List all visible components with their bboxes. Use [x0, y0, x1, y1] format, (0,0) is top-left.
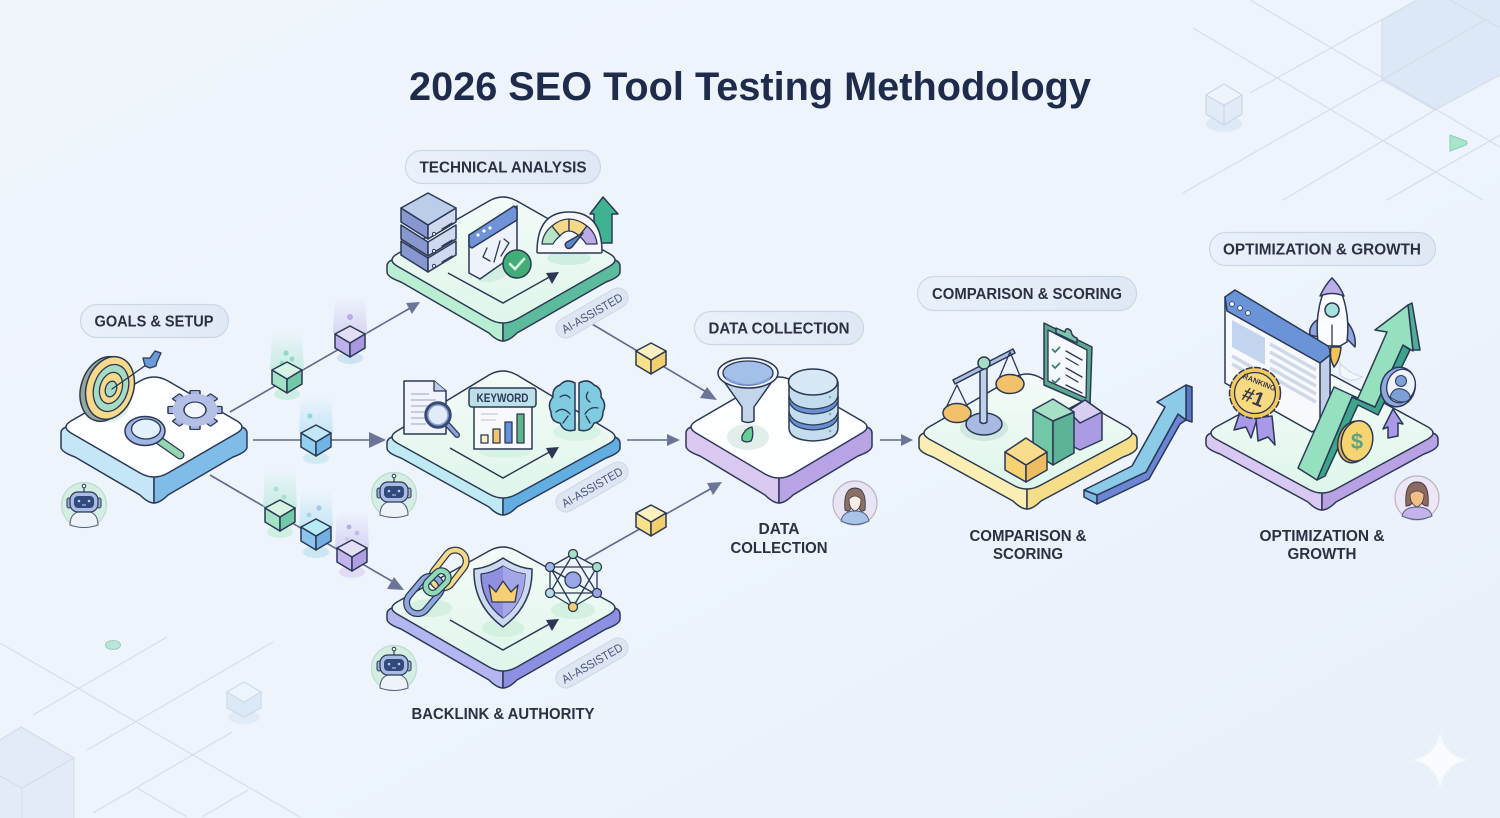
- heading pill: goals and setup: [80, 304, 228, 338]
- heading pill: technical analysis: TECHNICAL ANALYSIS: [420, 160, 586, 176]
- icon: dollar coin: $: [1351, 429, 1363, 454]
- icon: chain links: [402, 546, 471, 618]
- platform: keyword: [387, 371, 620, 515]
- icon: rocket: [1310, 278, 1362, 380]
- icon: gear: [168, 391, 222, 429]
- icon: brain: [549, 381, 605, 441]
- icon: green growth arrow: [1298, 303, 1420, 480]
- heading pill: data collection: [694, 312, 864, 344]
- heading pill: optimization and growth: OPTIMIZATION & GROWTH: [1223, 242, 1421, 258]
- label: optimization and growth: [1260, 528, 1384, 563]
- avatar: analyst: [833, 481, 877, 525]
- heading pill: optimization and growth: [1210, 232, 1436, 266]
- connector: technical to data collection: [592, 324, 717, 400]
- platform: backlink: [387, 547, 620, 688]
- icon: ranking badge: #1: [1239, 383, 1268, 412]
- label: comparison and scoring: SCORING: [993, 546, 1063, 563]
- icon: blue growth arrow: [1084, 385, 1192, 504]
- data cube: green lower: [263, 469, 297, 538]
- icon: document with magnifier: [404, 381, 457, 435]
- heading pill: technical analysis: [406, 150, 600, 184]
- heading pill: comparison and scoring: COMPARISON & SCORING: [932, 286, 1122, 303]
- data cube: purple upper: [333, 296, 367, 364]
- decorative green ellipse: [106, 640, 120, 650]
- icon: database cylinder: [788, 369, 838, 441]
- platform: comparison: [919, 374, 1137, 509]
- decorative cube: bottom left: [227, 682, 261, 724]
- platform: optimization: [1206, 373, 1438, 510]
- title: 2026 SEO Tool Testing Methodology: [409, 65, 1091, 109]
- badge: AI-assisted: AI-ASSISTED: [559, 640, 625, 686]
- background: bottom-left isometric grid: [0, 637, 300, 818]
- icon: check badge: [503, 250, 531, 278]
- icon: small purple up arrow: [1383, 409, 1403, 438]
- data cube: green upper: [270, 330, 304, 400]
- data cube: purple lower: [335, 511, 369, 578]
- platform: technical: [387, 197, 620, 341]
- robot badge: [372, 472, 416, 518]
- decorative sparkle: [1412, 732, 1468, 788]
- icon: clipboard checklist: [1044, 323, 1092, 405]
- heading pill: comparison and scoring: [918, 276, 1136, 310]
- icon: balance scale: [943, 349, 1024, 441]
- connector: goals to keyword research: [253, 432, 386, 448]
- connector: goals to technical analysis: [230, 302, 420, 412]
- panel: comparison and scoring: [918, 276, 1192, 563]
- background: top-right isometric grid: [1183, 0, 1500, 200]
- icon: ranking badge: RANKING: [1241, 372, 1277, 393]
- connector: backlink to data collection: [585, 482, 722, 560]
- platform: data: [686, 377, 872, 503]
- panel: optimization and growth: [1206, 232, 1439, 563]
- robot badge: [372, 646, 416, 690]
- panel: keyword research: [372, 371, 632, 518]
- connector: data to comparison: [880, 434, 913, 446]
- badge: AI-assisted: AI-ASSISTED: [559, 290, 625, 336]
- decorative green triangle: [1450, 135, 1467, 151]
- robot badge: [62, 482, 106, 528]
- data cube: yellow lower: [636, 505, 666, 536]
- icon: target with arrow: [72, 350, 161, 428]
- icon: code window: [469, 206, 517, 282]
- label: data collection: [730, 521, 828, 557]
- connector: goals to backlink: [210, 475, 404, 590]
- icon: server stack: [401, 193, 456, 272]
- icon: ranking badge: [1230, 368, 1280, 445]
- icon: keyword chart: KEYWORD: [476, 393, 528, 405]
- data cube: yellow upper: [636, 343, 666, 374]
- icon: speed gauge: [537, 212, 602, 265]
- label: backlink and authority: BACKLINK & AUTHORITY: [412, 706, 595, 723]
- heading pill: data collection: DATA COLLECTION: [708, 320, 850, 338]
- decorative cube: top right: [1206, 84, 1242, 132]
- label: comparison and scoring: [970, 528, 1086, 563]
- icon: dollar coin: [1333, 417, 1377, 466]
- icon: green box: [1033, 399, 1074, 465]
- icon: teal up arrow: [590, 197, 618, 243]
- label: data collection: COLLECTION: [730, 540, 828, 557]
- icon: crown shield: [474, 558, 532, 637]
- label: comparison and scoring: COMPARISON &: [970, 528, 1086, 545]
- panel: technical analysis: [387, 150, 632, 342]
- connector: keyword to data collection: [627, 434, 680, 446]
- icon: keyword chart: [469, 388, 536, 458]
- panel: goals and setup: [61, 304, 247, 528]
- icon: funnel: [718, 358, 778, 450]
- heading pill: goals and setup: GOALS & SETUP: [94, 314, 214, 330]
- label: data collection: DATA: [758, 521, 800, 538]
- icon: user circle: [1376, 363, 1420, 411]
- icon: browser window: [1225, 290, 1330, 432]
- platform: goals: [61, 377, 247, 503]
- badge: AI-assisted: AI-ASSISTED: [559, 464, 625, 510]
- label: optimization and growth: GROWTH: [1288, 546, 1356, 563]
- icon: magnifier: [125, 416, 180, 455]
- panel: backlink and authority: [372, 546, 632, 723]
- icon: purple box: [1068, 400, 1102, 450]
- icon: orange box: [1005, 438, 1047, 482]
- data cube: blue middle: [299, 395, 333, 464]
- panel: data collection: [686, 312, 877, 557]
- icon: network hexagon: [546, 550, 602, 619]
- data cube: blue lower: [299, 490, 333, 558]
- avatar: strategist: [1395, 476, 1439, 520]
- label: optimization and growth: OPTIMIZATION &: [1260, 528, 1384, 545]
